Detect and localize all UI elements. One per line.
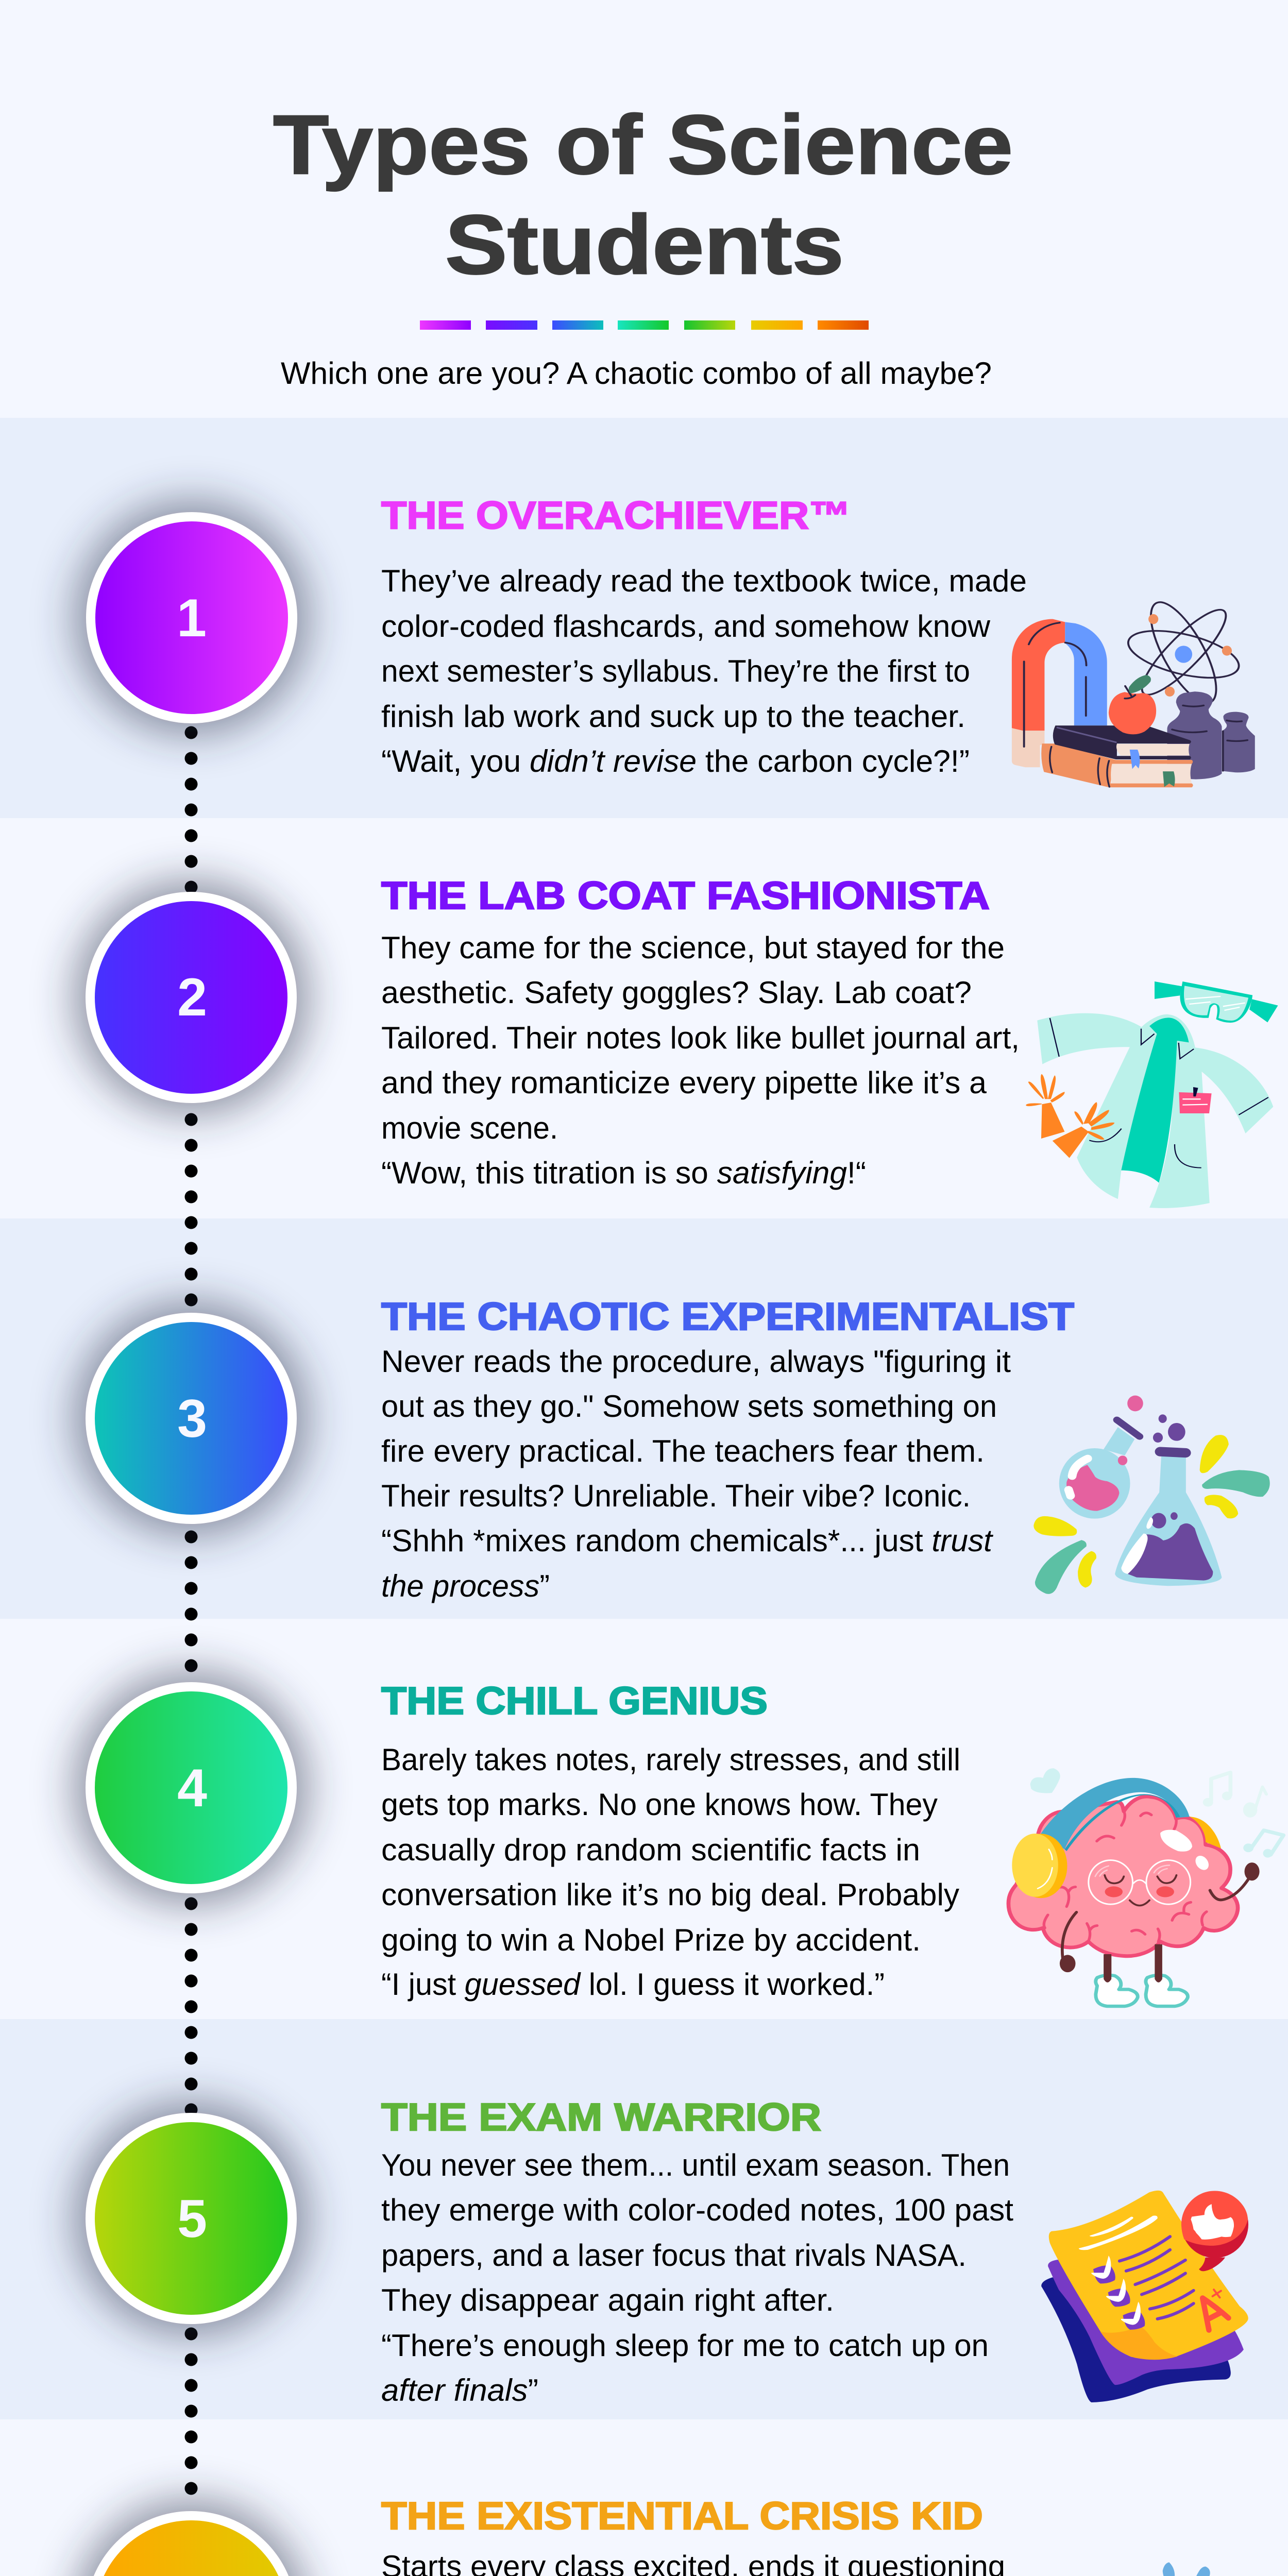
panel: the exam warrior [75,2095,1248,2408]
heading: the chill genius: THE CHILL GENIUS [381,1679,768,1722]
heading: the existential crisis kid: THE EXISTENTIAL CRISIS KID [381,2494,983,2537]
panel: the chaotic experimentalist [75,1295,1270,1603]
body text: the lab coat fashionista: “Wow, this titration is so satisfying!“ [381,1156,866,1190]
number badge 1 [76,502,308,734]
body text: the overachiever [381,564,1027,778]
body text: the chaotic experimentalist [381,1344,1011,1603]
subtitle: Which one are you? A chaotic combo of all maybe? [281,356,992,391]
body text: the lab coat fashionista: aesthetic. Safety goggles? Slay. Lab coat? [381,975,972,1010]
body text: the chill genius: going to win a Nobel Prize by accident. [381,1923,921,1957]
title: Students [445,197,844,292]
number badge 5 [75,2103,307,2334]
body text: the overachiever: next semester’s syllabus. They’re the first to [381,654,970,688]
body text: the chaotic experimentalist: “Shhh *mixes random chemicals*... just trust [381,1523,993,1558]
number badge 2 [75,882,307,1113]
body text: the chaotic experimentalist: fire every practical. The teachers fear them. [381,1434,985,1468]
number badge 2: 2 [177,968,207,1027]
rainbow divider [420,320,869,330]
body text: the exam warrior: You never see them... until exam season. Then [381,2148,1010,2182]
body text: the chill genius [381,1742,960,2002]
heading: the exam warrior: THE EXAM WARRIOR [381,2095,821,2139]
body text: the chill genius: conversation like it’s no big deal. Probably [381,1877,959,1912]
body text: the chaotic experimentalist: Their results? Unreliable. Their vibe? Iconic. [381,1479,971,1513]
body text: the exam warrior: They disappear again right after. [381,2283,834,2317]
number badge 3 [75,1302,307,1534]
timeline dots [184,726,198,2576]
body text: the exam warrior [381,2148,1013,2408]
panel: the chill genius [75,1672,1283,2006]
icon: brain with headphones [1008,1768,1283,2006]
body text: the exam warrior: after finals” [381,2373,538,2408]
icon: flasks and splashes [1033,1396,1270,1594]
icon: lab coat, goggles and gloves [1026,981,1278,1208]
body text: the chill genius: “I just guessed lol. I guess it worked.” [381,1967,885,2002]
body text: the chaotic experimentalist: the process” [381,1569,550,1603]
number badge 4 [75,1672,307,1904]
heading: the chaotic experimentalist: THE CHAOTIC EXPERIMENTALIST [381,1295,1074,1338]
number badge 1: 1 [177,588,207,648]
heading: the lab coat fashionista: THE LAB COAT FASHIONISTA [381,874,990,917]
icon: graded papers with thumbs-up bubble [1041,2191,1248,2402]
number badge 6 [75,2501,307,2576]
panel: the lab coat fashionista [75,874,1278,1208]
body text: the lab coat fashionista [381,930,1020,1190]
heading: the overachiever: THE OVERACHIEVER™ [381,494,851,537]
title [273,97,1013,292]
number badge 3: 3 [177,1389,207,1449]
body text: the lab coat fashionista: Tailored. Their notes look like bullet journal art, [381,1021,1020,1055]
panel: the overachiever [76,494,1255,787]
body text: the chill genius: Barely takes notes, rarely stresses, and still [381,1742,960,1777]
body text: the chill genius: casually drop random scientific facts in [381,1833,920,1867]
body text: the overachiever: They’ve already read the textbook twice, made [381,564,1027,598]
body text: the overachiever: “Wait, you didn’t revise the carbon cycle?!” [381,744,970,778]
body text: the lab coat fashionista: They came for the science, but stayed for the [381,930,1005,965]
body text: the overachiever: color-coded flashcards, and somehow know [381,609,991,643]
body text: the chill genius: gets top marks. No one knows how. They [381,1787,938,1822]
body text: the exam warrior: they emerge with color-coded notes, 100 past [381,2193,1013,2227]
icon: panicking student with glasses [1013,2562,1253,2576]
body text: the lab coat fashionista: movie scene. [381,1111,558,1145]
body text: the exam warrior: “There’s enough sleep for me to catch up on [381,2328,989,2363]
body text: the lab coat fashionista: and they romanticize every pipette like it’s a [381,1065,987,1100]
number badge 4: 4 [177,1758,207,1818]
body text: the overachiever: finish lab work and suck up to the teacher. [381,699,965,734]
number badge 5: 5 [177,2189,207,2249]
body text: the chaotic experimentalist: Never reads the procedure, always "figuring it [381,1344,1011,1379]
title: Types of Science [273,97,1013,192]
icon: magnet, atom, apple, books and weights [1012,595,1255,787]
panel: the existential crisis kid [75,2494,1253,2576]
body text: the exam warrior: papers, and a laser focus that rivals NASA. [381,2238,967,2273]
body text: the chaotic experimentalist: out as they go." Somehow sets something on [381,1389,997,1423]
